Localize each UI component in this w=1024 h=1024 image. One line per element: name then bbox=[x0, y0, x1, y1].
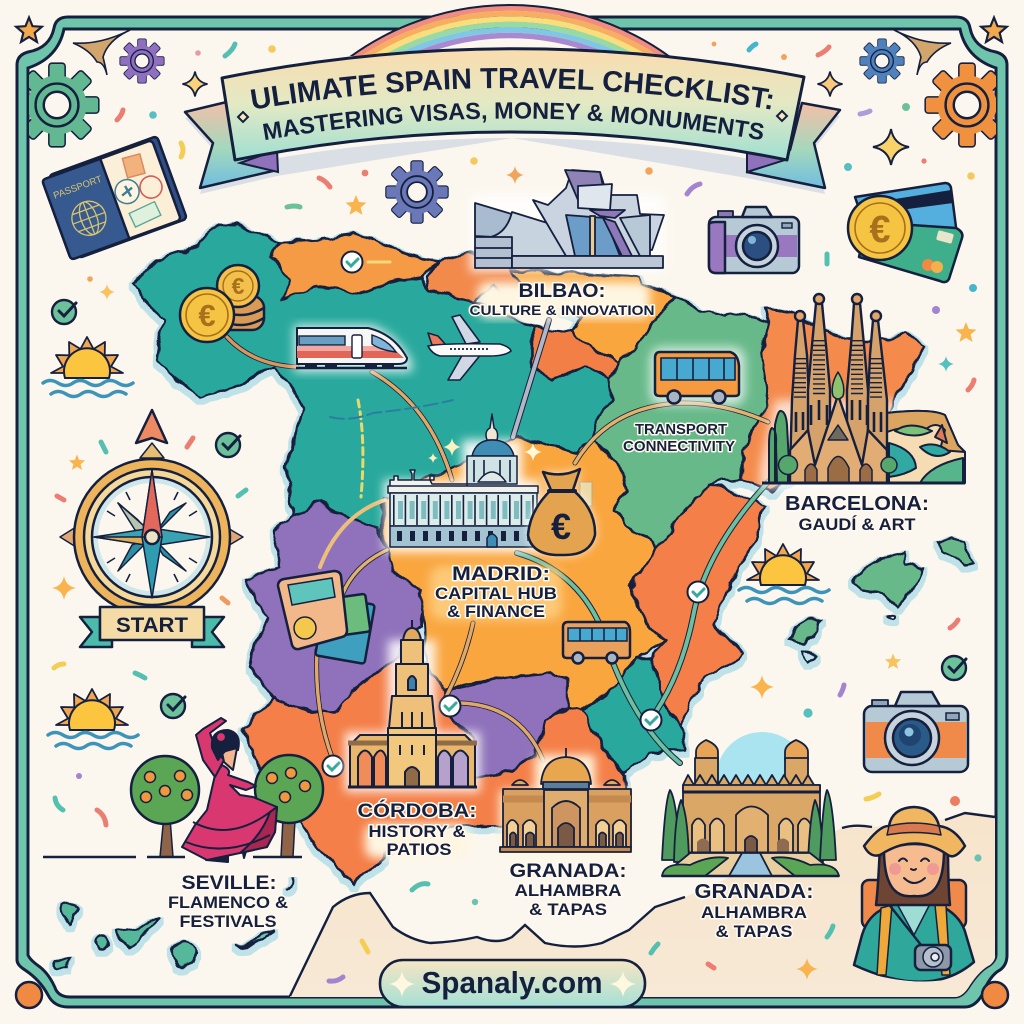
label: Bilbao: BILBAO: bbox=[518, 281, 606, 302]
region: Asturias orange bbox=[270, 233, 440, 300]
label: Madrid: MADRID: bbox=[452, 563, 550, 585]
banner body bbox=[222, 49, 804, 160]
Park Guell bbox=[885, 411, 965, 483]
region: Rioja red-orange bbox=[532, 327, 619, 380]
label: Seville: SEVILLE: bbox=[182, 873, 276, 894]
route: Madrid to payment bbox=[320, 500, 385, 567]
label: Granada left: ALHAMBRA bbox=[514, 882, 622, 900]
label: Bilbao bbox=[470, 281, 654, 318]
label: Granada right: GRANADA: bbox=[694, 881, 814, 903]
route: payment to Seville bbox=[317, 650, 333, 760]
start ribbon tails bbox=[80, 617, 224, 647]
label: Granada right bbox=[694, 881, 814, 941]
landmark: Alhambra bbox=[662, 732, 839, 876]
backpack bbox=[862, 880, 966, 928]
label: Bilbao: CULTURE & INNOVATION bbox=[470, 302, 654, 318]
banner right tail bbox=[747, 103, 840, 188]
standalone check badges bbox=[52, 300, 966, 718]
torso bbox=[852, 906, 976, 982]
label: Seville: FESTIVALS bbox=[180, 913, 276, 931]
label: Cordoba: PATIOS bbox=[386, 841, 452, 859]
icon: right orange tree bbox=[255, 755, 323, 857]
icon: passport: PASSPORT bbox=[52, 174, 104, 202]
banner left tail bbox=[185, 100, 277, 188]
icon: blue bus bbox=[563, 622, 630, 664]
hat bbox=[864, 807, 965, 856]
label: Cordoba: HISTORY & bbox=[368, 823, 466, 841]
icon: sun 1 bbox=[43, 337, 133, 396]
icon: airplane bbox=[428, 315, 511, 380]
icon: sun 2 bbox=[48, 689, 138, 748]
islands: Canaries bbox=[53, 875, 294, 968]
map of Spain bbox=[133, 222, 924, 883]
label: Transport connectivity: TRANSPORT bbox=[635, 421, 727, 438]
palace right ghost wing bbox=[580, 482, 592, 506]
palace ground floor bbox=[390, 526, 537, 547]
region: Aragon green bbox=[590, 297, 769, 557]
palace wing top bbox=[390, 470, 467, 487]
region: Jaen purple bbox=[440, 673, 567, 780]
title banner bbox=[184, 47, 842, 194]
route: Madrid to Barcelona bbox=[575, 403, 768, 463]
landmark: Sagrada Familia and Park Guell bbox=[760, 294, 965, 490]
icon: orange bus bbox=[650, 347, 745, 405]
icon: money bag: € bbox=[551, 506, 571, 547]
island: Mallorca bbox=[852, 552, 923, 607]
region: Andalusia red-orange bbox=[243, 657, 625, 883]
gears bbox=[15, 39, 1009, 223]
neck camera bbox=[915, 945, 951, 970]
visa stamps bbox=[122, 154, 145, 178]
compass rings bbox=[74, 459, 230, 615]
route: dashed railway bbox=[358, 400, 363, 497]
start label: START bbox=[116, 614, 188, 637]
route: Madrid to Cordoba bbox=[447, 623, 473, 695]
website pill bbox=[380, 960, 645, 1007]
route: Cordoba to Granada bbox=[460, 703, 543, 760]
icon: purple gear bbox=[120, 39, 164, 83]
compass rose diagonals bbox=[118, 503, 186, 537]
region: Madrid light orange bbox=[383, 437, 667, 710]
cathedral spires bbox=[790, 294, 887, 470]
palace columns bbox=[390, 493, 537, 526]
label: Granada left: GRANADA: bbox=[510, 860, 626, 882]
icon: indigo gear bbox=[386, 161, 448, 223]
region: Extremadura purple bbox=[245, 503, 423, 713]
route: coins to train bbox=[227, 337, 297, 367]
garden and water bbox=[662, 853, 839, 876]
label: Cordoba bbox=[358, 800, 476, 859]
globe bbox=[67, 196, 111, 240]
icon: sun 3 bbox=[739, 544, 829, 604]
label: Barcelona bbox=[785, 493, 929, 534]
label: Madrid: & FINANCE bbox=[447, 602, 545, 621]
route: Bilbao to Madrid bbox=[513, 320, 549, 437]
label: Transport connectivity: CONNECTIVITY bbox=[623, 438, 735, 455]
label: Barcelona: GAUDÍ & ART bbox=[798, 515, 916, 534]
region: Catalonia orange bbox=[743, 307, 924, 490]
region: Cantabria red-orange bbox=[427, 253, 535, 302]
icon: flamenco dancer bbox=[182, 718, 277, 862]
region: Murcia teal bbox=[582, 657, 685, 772]
north african coast land bbox=[290, 813, 995, 997]
icon: passport bbox=[41, 136, 187, 261]
icon: wallet and cards bbox=[278, 571, 375, 664]
cypress trees bbox=[769, 411, 790, 483]
icon: purple camera bbox=[709, 207, 799, 273]
landmark: Cordoba mosque tower bbox=[345, 620, 480, 792]
icon: train bbox=[294, 325, 412, 372]
cathedral perforations bbox=[800, 340, 876, 400]
icon: left orange tree bbox=[131, 756, 199, 857]
compass arrow bbox=[136, 410, 167, 443]
banner shadow bbox=[185, 110, 840, 194]
label: Granada right: ALHAMBRA bbox=[701, 903, 807, 922]
icon: euro coins bbox=[180, 265, 264, 342]
label: Cordoba: CÓRDOBA: bbox=[358, 800, 476, 822]
start ribbon plate bbox=[100, 607, 204, 640]
route: coast line bbox=[650, 480, 770, 720]
ground lines bbox=[43, 856, 302, 858]
icon: compass with START ribbon bbox=[60, 410, 243, 647]
face bbox=[884, 844, 944, 896]
icon: bank cards and euro coin: € bbox=[869, 209, 891, 251]
hair bbox=[876, 845, 950, 905]
island: Menorca bbox=[937, 538, 973, 565]
label: Granada right: & TAPAS bbox=[716, 922, 792, 941]
islands bbox=[53, 538, 973, 968]
landmark: Madrid royal palace bbox=[384, 414, 592, 552]
sun icons bbox=[43, 337, 829, 748]
icon: blue gear bbox=[860, 39, 904, 83]
banner folds bbox=[240, 150, 785, 172]
label: Madrid bbox=[430, 563, 562, 621]
icon: bank cards and euro coin bbox=[848, 183, 962, 282]
island: Ibiza bbox=[790, 620, 820, 642]
cathedral facade bbox=[790, 395, 887, 483]
icon: euro coins: € bbox=[198, 298, 216, 333]
route checkmarks bbox=[322, 252, 708, 776]
icon: green gear bbox=[29, 62, 100, 148]
icon: orange gear bbox=[924, 62, 996, 148]
label: Madrid: CAPITAL HUB bbox=[435, 584, 557, 603]
landmark: Granada palace with dome bbox=[500, 748, 632, 855]
title text line 1: ULIMATE SPAIN TRAVEL CHECKLIST: bbox=[250, 68, 772, 110]
route: train to Madrid bbox=[372, 372, 452, 480]
region: Valencia red-orange bbox=[630, 483, 765, 727]
compass rose main bbox=[94, 528, 210, 546]
character: traveler with hat and backpack bbox=[854, 807, 974, 982]
label: Seville: FLAMENCO & bbox=[168, 894, 288, 912]
icon: orange camera bbox=[864, 692, 968, 772]
travel routes bbox=[227, 320, 770, 763]
region: Galicia and Castile teal bbox=[133, 222, 612, 540]
label: Transport connectivity bbox=[623, 421, 735, 455]
compass side points bbox=[60, 527, 243, 547]
label: Granada left bbox=[510, 860, 626, 919]
sky halo bbox=[716, 732, 808, 824]
rainbow bbox=[350, 4, 670, 56]
website text: Spanaly.com bbox=[422, 965, 602, 1000]
label: Seville bbox=[168, 873, 288, 931]
route: Madrid to south-east bbox=[517, 553, 680, 763]
label: Granada left: & TAPAS bbox=[529, 901, 607, 919]
landmark: Guggenheim Bilbao bbox=[470, 170, 665, 272]
label: Barcelona: BARCELONA: bbox=[785, 493, 929, 515]
icon: money bag bbox=[528, 469, 595, 555]
region: Basque light orange bbox=[510, 270, 675, 363]
cypress trees alhambra bbox=[662, 790, 680, 860]
title text line 2: MASTERING VISAS, MONEY & MONUMENTS bbox=[263, 102, 764, 140]
palace dome bbox=[486, 414, 498, 440]
icon: euro coins: € bbox=[232, 273, 245, 299]
